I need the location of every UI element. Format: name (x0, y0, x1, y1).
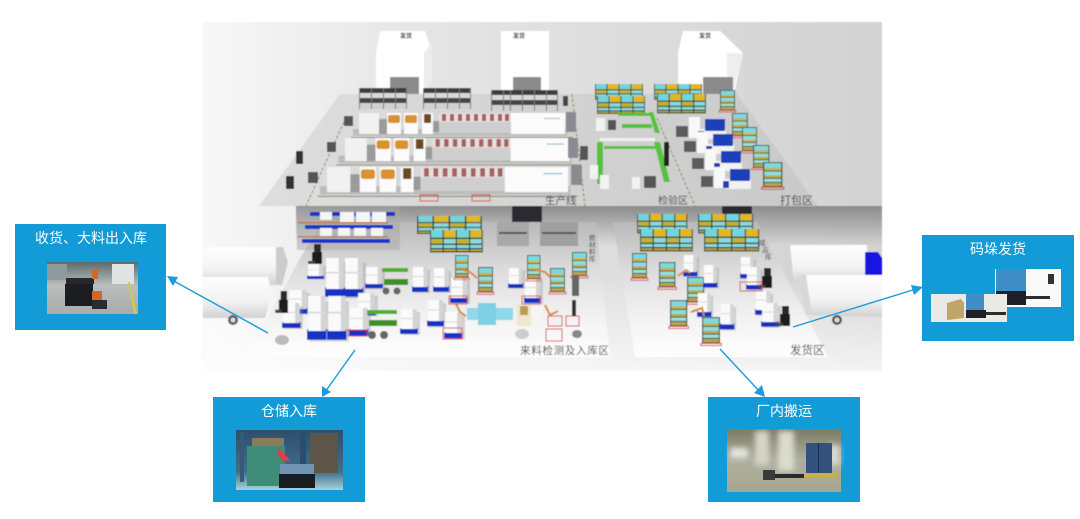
zone labels upper floor (545, 193, 813, 207)
zone label raw material: 材 (589, 240, 596, 249)
side machines and carts (286, 96, 582, 201)
packing machines (676, 117, 751, 189)
production line 1 (351, 113, 573, 138)
panel: storage (213, 397, 365, 502)
building: shipping box 3 (678, 31, 743, 95)
racks outbound single (631, 253, 721, 346)
zone labels upper floor: 检验区 (658, 194, 688, 207)
inspection machines (580, 118, 656, 189)
under-slab shadow (296, 206, 882, 246)
photo: AGV pallet truck (727, 429, 841, 492)
right truck upper (782, 245, 882, 283)
dark gap under slab (512, 206, 752, 222)
photo: forklift with pallets (47, 262, 138, 314)
building: shipping box 1 (376, 31, 432, 95)
zone label inbound: 来料检测及入库区 (520, 344, 610, 357)
arrow: to transfer card (720, 349, 765, 397)
zone label finished goods: 品 (762, 246, 768, 254)
production carts (359, 88, 558, 111)
arrow: to storage card (322, 350, 355, 397)
teal racks lower (417, 216, 483, 252)
building: shipping box 3: 发货 (699, 32, 711, 40)
arrow: to palletizing card (793, 285, 923, 327)
panel: transfer (708, 397, 860, 502)
robot forklifts inbound (275, 244, 579, 316)
right truck lower (798, 275, 882, 325)
building: shipping box 2 (501, 31, 549, 95)
orange arms outbound (678, 270, 704, 316)
heading: storage: 仓储入库 (261, 403, 317, 419)
upper floor slab (259, 94, 818, 206)
panel: receiving (15, 224, 166, 330)
red frames outbound (740, 282, 762, 291)
red frames inbound (348, 296, 579, 341)
zone label finished goods: 库 (765, 252, 772, 261)
right lower floor (613, 222, 828, 357)
scene background (202, 22, 882, 371)
zone label raw material: 料 (589, 247, 596, 256)
building: shipping box 1: 发货 (400, 32, 412, 40)
zone labels upper floor: 打包区 (780, 193, 813, 207)
left truck upper (203, 247, 288, 285)
zone label raw material: 库 (589, 254, 596, 263)
building: shipping box 2: 发货 (513, 32, 525, 40)
zone label finished goods (759, 238, 772, 261)
green racks upper (595, 84, 706, 114)
inspection machine cyan (467, 303, 543, 326)
zone label outbound: 发货区 (790, 343, 824, 357)
grey shelves (497, 222, 578, 246)
white pallets outbound (683, 255, 781, 331)
left lower floor (246, 222, 610, 357)
zone label raw material (589, 234, 596, 263)
production line 2 (336, 138, 578, 166)
storage rack orange blue (297, 207, 400, 250)
zone label finished goods: 成 (759, 238, 766, 247)
heading: palletizing: 码垛发货 (970, 241, 1026, 257)
racks inbound (454, 252, 588, 294)
photo: robot with box (931, 294, 1007, 322)
green stations (367, 268, 408, 339)
photo: AGV with green cage (236, 430, 343, 490)
arrow: to receiving card (167, 276, 268, 333)
illustration: factory layout scene (202, 22, 882, 371)
AMR round robots (275, 329, 582, 345)
heading: transfer: 厂内搬运 (756, 403, 812, 419)
zone labels upper floor: 生产线 (545, 194, 577, 207)
robot forklifts outbound (758, 268, 790, 326)
racks outbound wide (637, 214, 759, 252)
robots orange arms (456, 270, 558, 316)
photo: robot with sensor (995, 269, 1061, 307)
single racks packing (719, 90, 784, 189)
left truck lower (203, 277, 272, 325)
zone divider lines (306, 94, 695, 206)
inspection conveyor (597, 112, 670, 184)
heading: receiving: 收货、大料出入库 (35, 230, 147, 246)
production line 3 (318, 167, 577, 197)
panel: palletizing (922, 235, 1074, 341)
white pallets inbound (282, 258, 543, 342)
zone label raw material: 原 (589, 234, 596, 242)
